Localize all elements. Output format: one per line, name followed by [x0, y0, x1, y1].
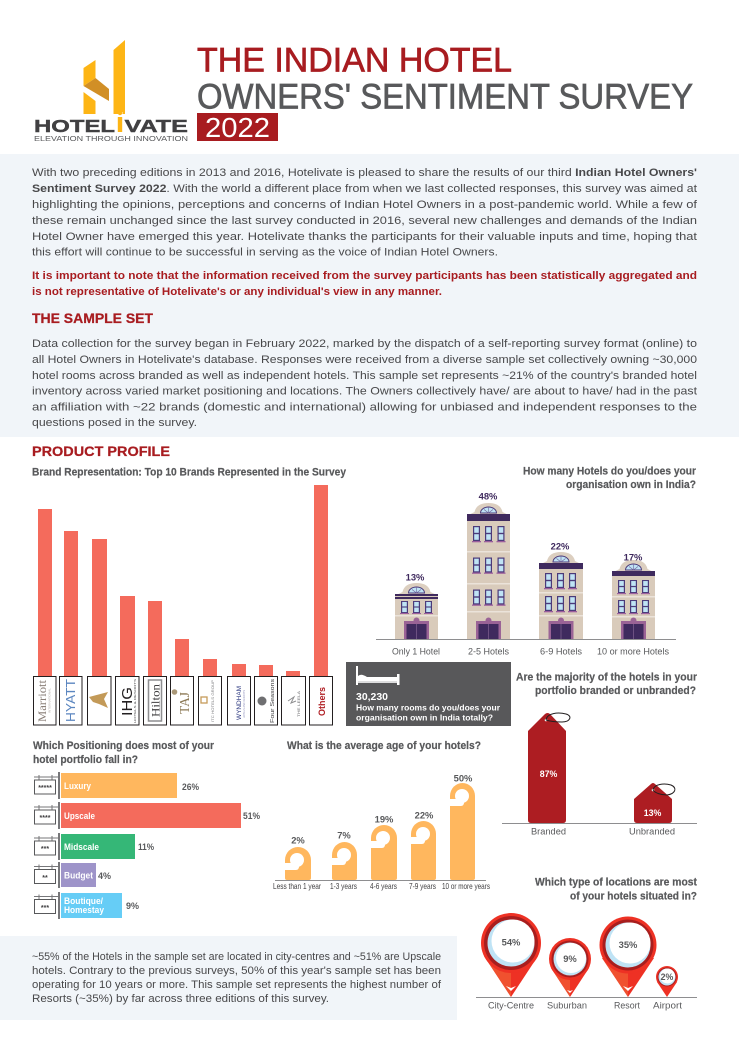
- building: 6-9 Hotels: [539, 540, 583, 639]
- pin: resort: 35%: [619, 939, 638, 950]
- pin: airport: [656, 966, 678, 997]
- intro text: [32, 167, 698, 258]
- intro text: these remain unchanged since the last survey conducted in 2016, several new challenges and demands of the Indian: [32, 215, 697, 227]
- bar chart: brands: TAJ: [178, 691, 193, 714]
- bar chart: brands: HOTELS & RESORTS: [133, 679, 137, 723]
- bar chart: brands: IHG: [119, 687, 136, 716]
- intro text: Sentiment Survey 2022 . With the world a different place from when we last collected responses, this survey was aimed at: [32, 183, 698, 195]
- bar: boutique: Boutique/: [64, 896, 104, 906]
- bar chart: brands: HOTELS AND RESORTS: [242, 690, 246, 718]
- chart: hotel age door hangers: 4-6 years: [370, 882, 397, 891]
- tag: branded: 87%: [540, 769, 557, 779]
- bar: midscale: 11%: [138, 841, 155, 852]
- building: Only 1 Hotel: 13%: [406, 572, 425, 582]
- bar: boutique: Homestay: [64, 905, 104, 915]
- chart: hotels owned buildings: 6-9 Hotels: [540, 646, 582, 658]
- chart: branded vs unbranded tags: [502, 713, 697, 838]
- heading: locations: [535, 876, 697, 902]
- hanger: less than 1 year: 2%: [291, 834, 305, 846]
- title: THE INDIAN HOTEL: [197, 42, 512, 80]
- heading: average age: What is the average age of your hotels?: [287, 740, 481, 752]
- bar chart: positioning: [34, 772, 261, 919]
- chart: branded vs unbranded tags: Unbranded: [629, 826, 675, 838]
- heading: locations: of your hotels situated in?: [570, 890, 697, 902]
- heading: product profile: PRODUCT PROFILE: [32, 444, 170, 459]
- bar: luxury: Luxury: [64, 781, 91, 791]
- bar: budget: Budget: [64, 870, 93, 880]
- title: 2022: [205, 112, 270, 143]
- panel: introduction background: [0, 154, 739, 437]
- disclaimer: is not representative of Hotelivate's or any individual's view in any manner.: [32, 286, 442, 298]
- sample set text: hotel rooms across branded as well as independent hotels. This sample set represents ~21% of the country's branded hotel: [32, 370, 697, 382]
- sample set text: an affiliation with ~22 brands (domestic and international) allowing for unbiased and independent responses to the: [32, 402, 697, 414]
- tag: unbranded: [634, 783, 675, 823]
- intro text: highlighting the opinions, perceptions and concerns of Indian Hotel Owners in a post-pandemic world. While a few of: [32, 199, 698, 211]
- hanger: less than 1 year: [285, 834, 311, 880]
- sample set text: all Hotel Owners in Hotelivate's database. Responses were received from a diverse sample set collectively owning ~30,000: [32, 354, 697, 366]
- hanger: 1-3 years: [332, 830, 357, 880]
- building: 2-5 Hotels: [467, 490, 510, 639]
- bar chart: brands: INTERNATIONAL: [48, 688, 52, 713]
- chart: location pins: Resort: [614, 1000, 640, 1012]
- sample set text: [32, 338, 698, 429]
- intro text: With two preceding editions in 2013 and 2016, Hotelivate is pleased to share the results of our third Indian Hotel Owners': [32, 167, 697, 179]
- heading: branded or unbranded: [516, 672, 697, 697]
- chart: hotel age door hangers: [273, 772, 490, 891]
- tag: branded: [528, 713, 570, 823]
- heading: branded or unbranded: Are the majority of the hotels in your: [516, 672, 697, 684]
- heading: locations: Which type of locations are most: [535, 876, 697, 888]
- chart: location pins: Suburban: [547, 1000, 587, 1012]
- tag: unbranded: 13%: [644, 808, 661, 818]
- bar: budget: 4%: [98, 870, 112, 881]
- building: 6-9 Hotels: 22%: [551, 540, 570, 552]
- summary text: [32, 951, 442, 1005]
- heading: hotels owned: [523, 466, 696, 491]
- heading: positioning: hotel portfolio fall in?: [33, 754, 138, 766]
- hanger: 4-6 years: [371, 814, 397, 880]
- sample set text: inventory across varied market positioning and locations. The Owners collectively have/ are about to have/ had in the past: [32, 386, 698, 398]
- bar: luxury: [34, 772, 200, 799]
- hanger: 10 or more years: [450, 772, 475, 880]
- summary text: operating for 10 years or more. This sample set represents the highest number of: [32, 979, 442, 991]
- chart: location pins: [476, 913, 697, 1012]
- heading: brand representation: Brand Representation: Top 10 Brands Represented in the Survey: [32, 466, 346, 478]
- panel: summary background: [0, 936, 457, 1020]
- sample set text: questions posed in the survey.: [32, 417, 197, 429]
- bar: boutique: [34, 892, 140, 919]
- chart: hotels owned buildings: [376, 490, 676, 658]
- intro text: Hotel Owner have emerged this year. Hotelivate thanks the participants for their valuable inputs and time, hoping that: [32, 231, 698, 243]
- title: OWNERS' SENTIMENT SURVEY: [197, 76, 693, 116]
- logo: Hotelivate: ELEVATION THROUGH INNOVATION: [34, 134, 188, 143]
- heading: the sample set: THE SAMPLE SET: [32, 311, 154, 326]
- bar chart: brands: Four Seasons: [270, 679, 276, 723]
- hanger: 7-9 years: [411, 810, 436, 880]
- bar: budget: **: [42, 875, 48, 882]
- building: 2-5 Hotels: 48%: [479, 490, 498, 502]
- intro text: this effort will continue to be successful in serving as the voice of Indian Hotel Owners.: [32, 246, 498, 258]
- icon: bed: [356, 666, 400, 685]
- bar chart: brands: ITC HOTELS GROUP: [210, 680, 215, 722]
- logo: Hotelivate: HOTEL: [34, 116, 115, 136]
- pin: suburban: 9%: [563, 953, 577, 964]
- panel: total rooms: How many rooms do you/does your: [356, 702, 501, 712]
- heading: positioning: [33, 740, 214, 766]
- summary text: Resorts (~35%) by far across three editions of this survey.: [32, 993, 329, 1005]
- bar chart: brands: Others: [317, 687, 328, 716]
- chart: hotels owned buildings: Only 1 Hotel: [392, 646, 440, 658]
- title: [197, 42, 693, 143]
- bar: budget: [34, 862, 112, 888]
- hanger: 10 or more years: 50%: [454, 772, 473, 784]
- panel: total rooms: [346, 662, 511, 726]
- pin: resort: [600, 916, 656, 997]
- chart: hotels owned buildings: 2-5 Hotels: [468, 646, 509, 658]
- bar: luxury: 26%: [182, 781, 200, 792]
- chart: hotel age door hangers: 1-3 years: [330, 882, 357, 891]
- chart: branded vs unbranded tags: Branded: [531, 826, 566, 838]
- chart: location pins: City-Centre: [488, 1000, 534, 1012]
- bar: luxury: *****: [38, 785, 52, 792]
- heading: hotels owned: How many Hotels do you/does your: [523, 466, 696, 478]
- chart: hotel age door hangers: Less than 1 year: [273, 882, 321, 891]
- disclaimer: [32, 270, 697, 298]
- heading: positioning: Which Positioning does most of your: [33, 740, 214, 752]
- bar: upscale: 51%: [243, 810, 261, 821]
- chart: location pins: Airport: [653, 1000, 682, 1012]
- hanger: 7-9 years: 22%: [415, 810, 434, 820]
- hanger: 4-6 years: 19%: [375, 814, 394, 824]
- pin: suburban: [549, 938, 591, 997]
- bar: boutique: ***: [41, 905, 49, 912]
- summary text: hotels. Contrary to the previous surveys, 50% of this year's sample set has been: [32, 965, 441, 977]
- bar: upscale: ****: [40, 815, 51, 822]
- panel: total rooms: 30,230: [356, 692, 388, 703]
- hanger: 1-3 years: 7%: [337, 830, 351, 840]
- heading: hotels owned: organisation own in India?: [566, 479, 696, 491]
- bar chart: brands: WYNDHAM: [237, 686, 243, 720]
- bar: midscale: [34, 833, 155, 860]
- bar chart: brands: THE LEELA: [296, 691, 301, 717]
- building: 10 or more Hotels: 17%: [624, 552, 643, 562]
- chart: hotel age door hangers: 10 or more years: [442, 882, 490, 891]
- disclaimer: It is important to note that the information received from the survey participants has been statistically aggregated and: [32, 270, 697, 282]
- bar chart: brands: [34, 485, 332, 725]
- bar: boutique: 9%: [126, 900, 140, 911]
- building: Only 1 Hotel: [395, 572, 438, 639]
- pin: city-centre: 54%: [502, 936, 521, 948]
- building: 10 or more Hotels: [612, 552, 655, 639]
- bar: midscale: ***: [41, 846, 49, 853]
- pin: city-centre: [481, 913, 541, 997]
- bar: upscale: [34, 802, 261, 829]
- bar chart: brands: HYATT: [63, 679, 78, 722]
- bar: upscale: Upscale: [64, 811, 95, 821]
- bar chart: brands: Hilton: [148, 684, 162, 717]
- pin: airport: 2%: [661, 972, 674, 982]
- chart: hotel age door hangers: 7-9 years: [409, 882, 436, 891]
- logo: Hotelivate: VATE: [124, 116, 188, 136]
- bar: midscale: Midscale: [64, 842, 99, 852]
- sample set text: Data collection for the survey began in February 2022, marked by the dispatch of a self-reporting survey format (online) to: [32, 338, 697, 350]
- logo: Hotelivate: [34, 40, 188, 143]
- heading: branded or unbranded: portfolio branded or unbranded?: [535, 685, 696, 697]
- panel: total rooms: organisation own in India totally?: [356, 712, 493, 722]
- chart: hotels owned buildings: 10 or more Hotels: [597, 646, 669, 658]
- summary text: ~55% of the Hotels in the sample set are located in city-centres and ~51% are Upscale: [32, 951, 441, 963]
- bar chart: brands: Marriott: [35, 679, 49, 722]
